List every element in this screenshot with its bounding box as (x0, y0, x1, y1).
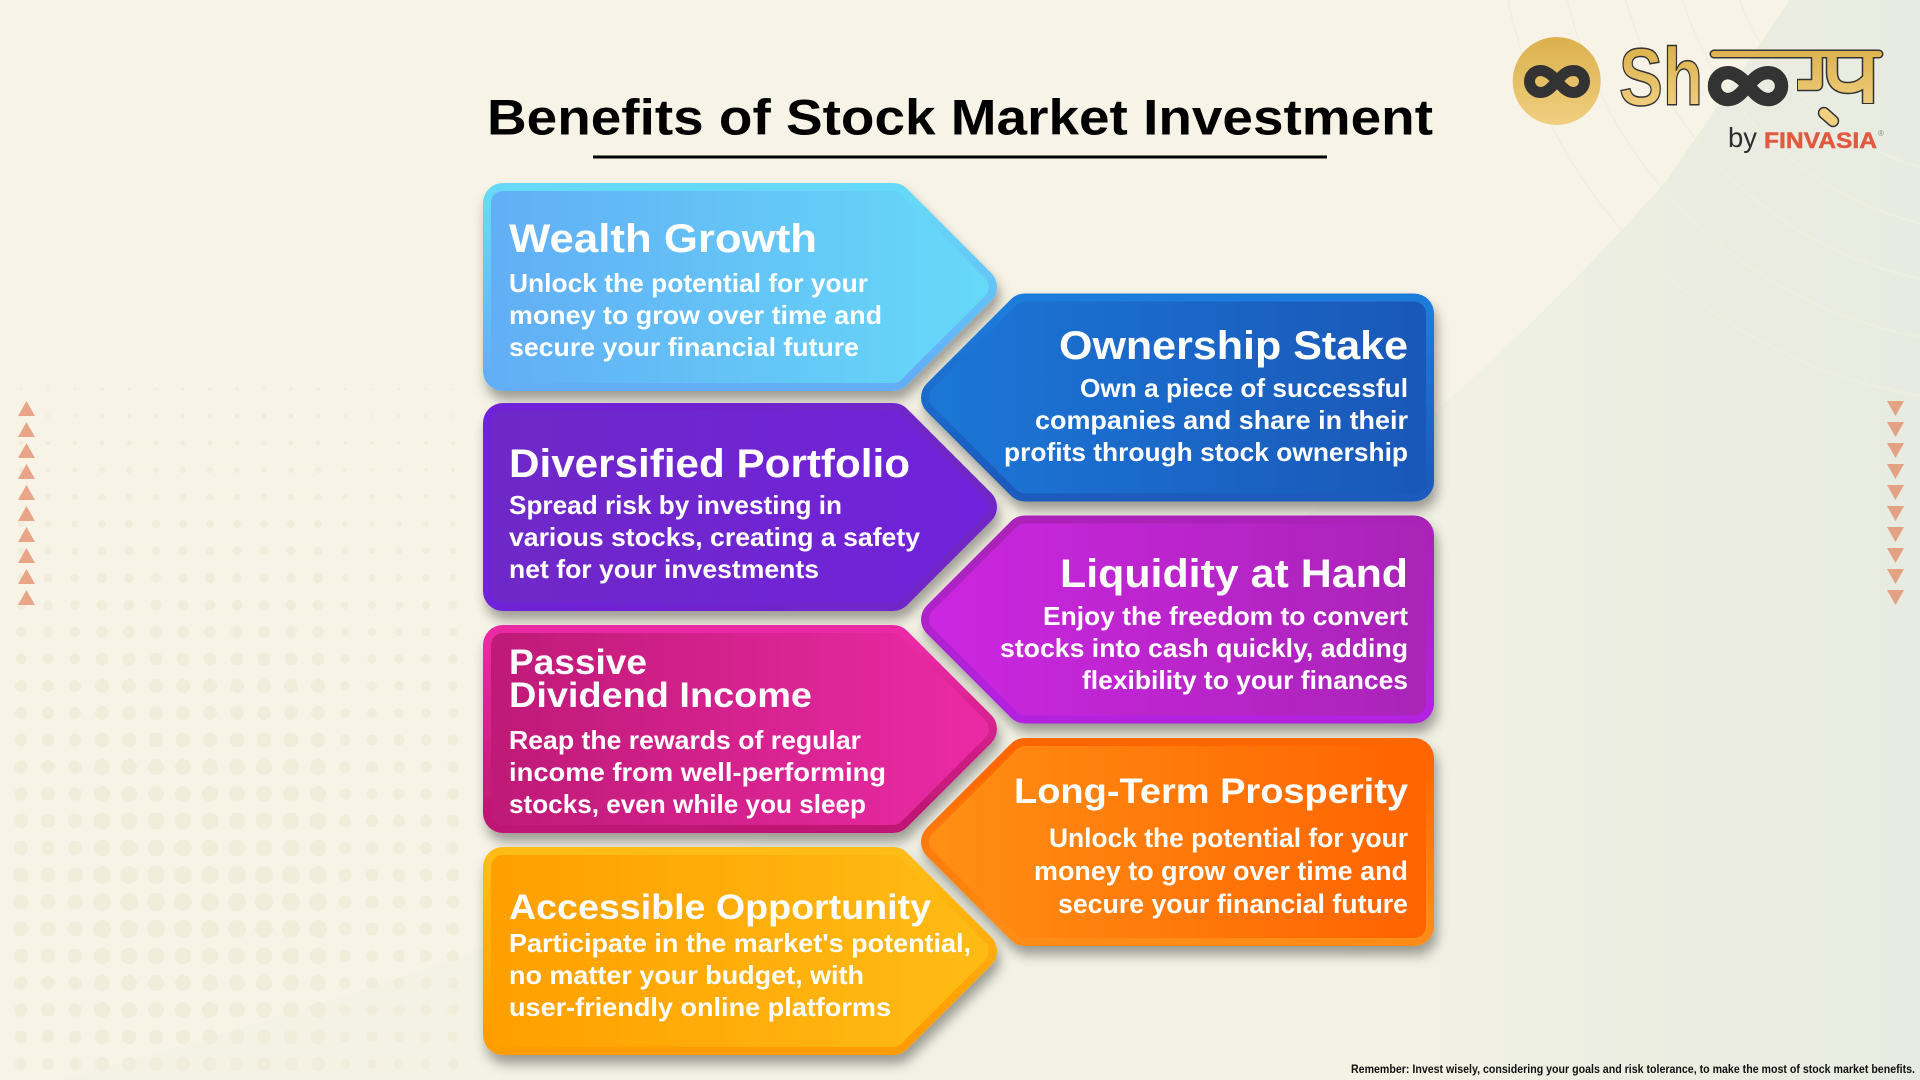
logo decorative strokes (1714, 54, 1879, 121)
body text: Participate in the market's potential, (509, 928, 971, 958)
body text: various stocks, creating a safety (509, 522, 921, 552)
body text (509, 928, 971, 1022)
body text: profits through stock ownership (1004, 437, 1408, 467)
panel: Accessible Opportunity (503, 867, 977, 1035)
body text: money to grow over time and (1034, 856, 1408, 886)
heading: Wealth Growth (509, 217, 817, 261)
body text (509, 268, 882, 362)
heading (509, 643, 812, 715)
logo registered mark: ® (1878, 129, 1884, 138)
body text: net for your investments (509, 554, 819, 584)
title underline (593, 156, 1327, 158)
panel: Passive Dividend Income (503, 643, 977, 819)
arrow shape (941, 536, 1414, 704)
logo wordmark: Sh (1619, 32, 1703, 123)
body text: Own a piece of successful (1080, 373, 1408, 403)
body text: money to grow over time and (509, 300, 882, 330)
arrow shape (503, 203, 977, 371)
body text (1004, 373, 1408, 467)
panel: Wealth Growth (503, 203, 977, 371)
arrow shape (503, 645, 977, 813)
heading: Diversified Portfolio (509, 442, 910, 486)
body text: Unlock the potential for your (1049, 823, 1408, 853)
body text (509, 490, 921, 584)
title: Benefits of Stock Market Investment (487, 90, 1433, 146)
icon: column of down triangles (1887, 401, 1904, 605)
panel: Liquidity at Hand (941, 536, 1414, 704)
arrow shape (503, 867, 977, 1035)
arrow shape (941, 314, 1414, 482)
body text: secure your financial future (509, 332, 859, 362)
heading: Ownership Stake (1059, 324, 1408, 368)
arrow shape (941, 758, 1414, 926)
heading: Accessible Opportunity (509, 888, 932, 927)
body text: companies and share in their (1035, 405, 1408, 435)
heading: Liquidity at Hand (1060, 552, 1408, 596)
logo badge icon (1513, 37, 1601, 125)
body text: no matter your budget, with (509, 960, 864, 990)
heading: Long-Term Prosperity (1014, 772, 1409, 811)
logo by line: by (1728, 122, 1757, 153)
body text: stocks into cash quickly, adding (1000, 633, 1408, 663)
logo (1513, 32, 1884, 153)
body text (1034, 823, 1408, 919)
panel: Long-Term Prosperity (941, 758, 1414, 926)
body text: user-friendly online platforms (509, 992, 891, 1022)
body text: Spread risk by investing in (509, 490, 842, 520)
logo infinity mark (1714, 73, 1782, 100)
body text: Enjoy the freedom to convert (1043, 601, 1408, 631)
body text: stocks, even while you sleep (509, 789, 866, 819)
background halftone dots (21, 389, 454, 1064)
heading: Passive (509, 643, 647, 682)
icon: column of up triangles (18, 401, 35, 605)
body text: flexibility to your finances (1082, 665, 1408, 695)
body text: income from well-performing (509, 757, 886, 787)
arrow shape (503, 423, 977, 591)
body text: Reap the rewards of regular (509, 725, 861, 755)
body text: Unlock the potential for your (509, 268, 868, 298)
body text: secure your financial future (1058, 889, 1408, 919)
body text (1000, 601, 1408, 695)
panel: Ownership Stake (941, 314, 1414, 482)
logo Finvasia: FINVASIA (1764, 128, 1877, 153)
panel: Diversified Portfolio (503, 423, 977, 591)
body text (509, 725, 886, 819)
heading: Dividend Income (509, 676, 812, 715)
